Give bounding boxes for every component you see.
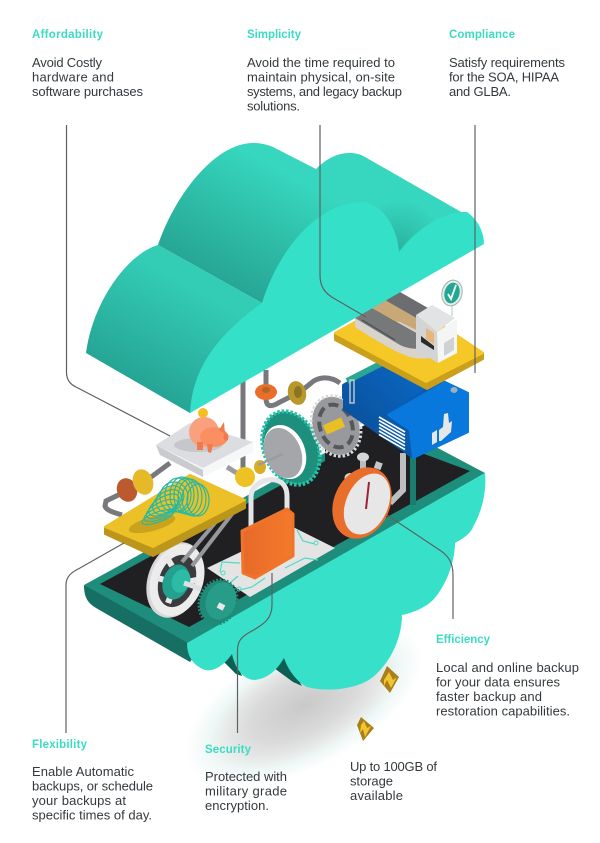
icon: thumbs up <box>432 413 452 445</box>
heading and text: Simplicity: maintain physical, on-site <box>247 70 395 84</box>
bottom cloud: dark tray interior <box>100 425 470 627</box>
icon: stopwatch <box>321 452 403 548</box>
teal bar and chain link <box>347 360 388 403</box>
heading and text: Security: military grade <box>205 784 287 798</box>
heading and text: Flexibility <box>32 739 153 822</box>
scissor linkage <box>182 510 232 566</box>
leader line: Affordability <box>66 125 170 436</box>
heading and text: Affordability <box>32 29 144 99</box>
top cloud: extruded side <box>86 143 484 413</box>
bottom cloud: tray rim <box>84 420 485 643</box>
icon: lightning bolts <box>357 666 399 741</box>
yellow platform with slinky <box>105 475 245 556</box>
icon: check mark bubble <box>439 278 465 316</box>
heading and text: Affordability: Avoid Costly <box>32 55 102 70</box>
heading and text: Flexibility: Flexibility <box>32 739 88 751</box>
bottom cloud: underside and rim side <box>84 585 302 686</box>
heading and text: Simplicity: systems, and legacy backup <box>247 84 402 99</box>
white platform with piggy bank <box>156 423 253 477</box>
leader line: Efficiency <box>387 515 453 619</box>
heading and text: Simplicity: solutions. <box>247 98 300 114</box>
icon: piggy bank <box>189 408 228 453</box>
heading and text: Affordability: Affordability <box>32 29 104 41</box>
icon: padlock <box>242 480 293 578</box>
heading and text: Security: encryption. <box>205 798 269 813</box>
heading and text: Compliance <box>449 29 566 99</box>
pipes and vertical pole <box>105 370 413 515</box>
heading and text: Flexibility: Enable Automatic <box>32 764 134 779</box>
leader line: Compliance <box>474 125 476 373</box>
leader line: Simplicity <box>320 125 366 317</box>
icon: white device box <box>416 305 457 363</box>
heading and text: Affordability: hardware and <box>32 70 114 84</box>
text: storage: storage <box>350 774 393 788</box>
heading and text: Security <box>205 744 287 813</box>
text: storage: Up to 100GB of <box>350 759 437 774</box>
heading and text: Simplicity <box>247 29 402 114</box>
heading and text: Flexibility: backups, or schedule <box>32 778 153 794</box>
icon: large teal gear with grey disc <box>252 403 330 493</box>
top cloud: front face <box>190 202 484 413</box>
heading and text: Compliance: and GLBA. <box>449 84 511 99</box>
heading and text: Security: Security <box>205 744 252 756</box>
heading and text: Compliance: Compliance <box>449 29 515 41</box>
yellow top platform <box>335 297 483 389</box>
heading and text: Efficiency: Local and online backup <box>436 660 579 675</box>
icon: slinky <box>140 477 209 528</box>
heading and text: Efficiency: for your data ensures <box>436 674 560 690</box>
icon: white wheel with teal hub <box>136 534 214 626</box>
circuit board <box>207 527 335 597</box>
icon: orange and gold nuts <box>113 379 309 505</box>
blue server box <box>343 364 468 458</box>
icon: small teal gear <box>194 575 242 629</box>
heading and text: Affordability: software purchases <box>32 84 144 99</box>
heading and text: Efficiency: faster backup and <box>436 689 542 704</box>
heading and text: Flexibility: specific times of day. <box>32 808 152 822</box>
heading and text: Compliance: Satisfy requirements <box>449 55 566 70</box>
heading and text: Simplicity: Avoid the time required to <box>247 55 395 70</box>
heading and text: Security: Protected with <box>205 769 287 784</box>
leader line: Flexibility <box>66 543 124 733</box>
ground shadow <box>160 589 448 821</box>
heading and text: Efficiency <box>436 634 579 718</box>
conveyor printer <box>355 292 436 359</box>
leader line: Security <box>238 573 272 733</box>
text: storage <box>350 759 437 803</box>
heading and text: Efficiency: restoration capabilities. <box>436 704 570 718</box>
icon: grey sprocket with yellow axle <box>303 389 369 463</box>
heading and text: Compliance: for the SOA, HIPAA <box>449 70 559 84</box>
heading and text: Simplicity: Simplicity <box>247 29 302 41</box>
heading and text: Flexibility: your backups at <box>32 793 126 808</box>
vent stripes <box>379 417 405 450</box>
heading and text: Efficiency: Efficiency <box>436 634 491 646</box>
bottom cloud: front face <box>187 473 485 690</box>
text: storage: available <box>350 788 403 803</box>
